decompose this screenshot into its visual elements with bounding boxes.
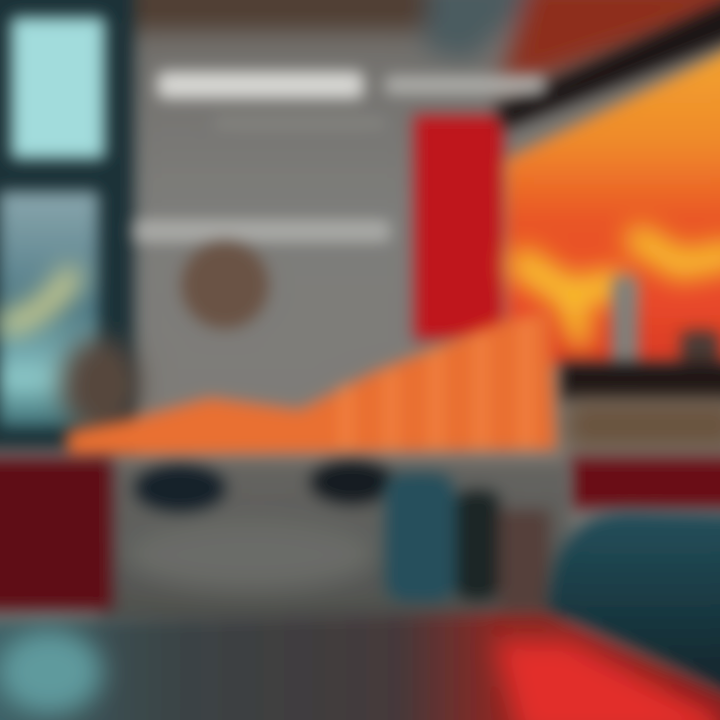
yellow zigzag chart line	[525, 240, 720, 335]
cyan reflection	[0, 630, 102, 714]
subheading: blurred text	[135, 220, 390, 242]
dark stool right	[310, 460, 394, 504]
teal chair right	[548, 512, 720, 700]
ceiling	[110, 0, 720, 90]
dark stool left	[134, 464, 226, 512]
yellow streak in pane	[0, 270, 75, 325]
panel: dark red block left	[0, 458, 112, 610]
upper window pane	[12, 18, 104, 158]
figure silhouette	[612, 275, 638, 400]
panel: red column	[414, 115, 504, 340]
lower window pane	[0, 192, 98, 427]
person at window	[60, 337, 140, 433]
dark red bench	[570, 458, 720, 508]
panel: floor area	[100, 460, 570, 622]
window frame	[0, 0, 135, 450]
icon: brown circle	[181, 241, 269, 329]
red glare	[495, 640, 720, 720]
teal chair centre	[385, 472, 550, 610]
panel: heat-coloured right wall	[495, 0, 720, 508]
bar chart: orange area	[68, 310, 556, 456]
dark figure right	[680, 330, 720, 370]
brown cabinet	[565, 400, 720, 450]
heading: blurred title	[158, 72, 545, 128]
light rug	[125, 520, 375, 590]
panel: left window	[0, 0, 135, 450]
panel: foreground table	[0, 612, 720, 720]
dark diagonal beam	[495, 0, 720, 130]
dark shelf	[560, 362, 720, 400]
